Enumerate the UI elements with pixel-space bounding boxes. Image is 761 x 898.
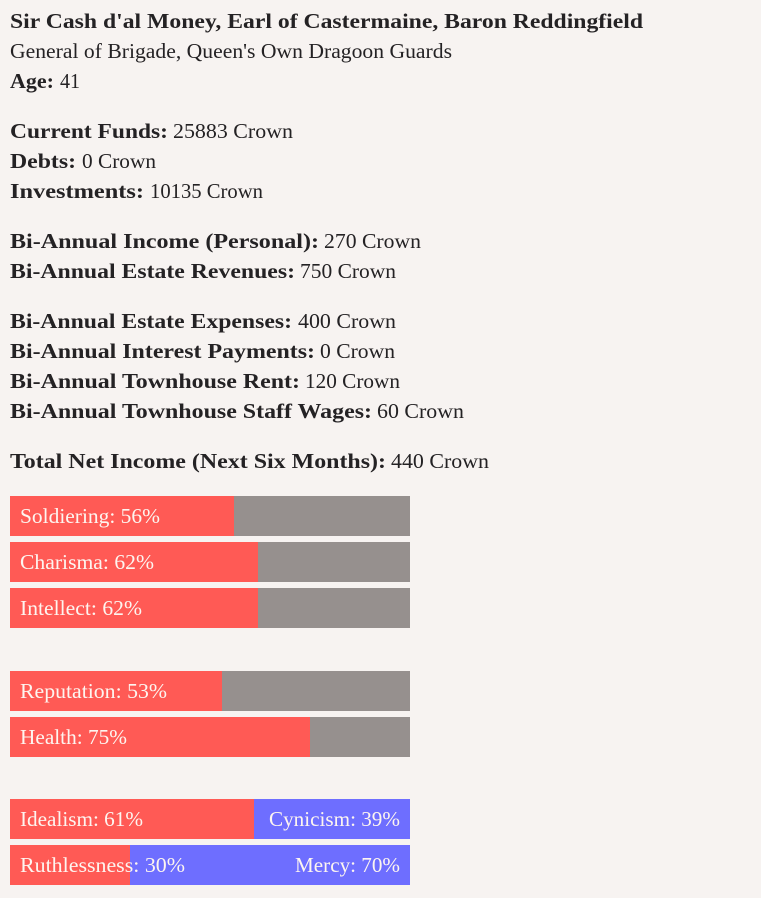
text block: income: 270 Crown <box>324 229 421 253</box>
text block: finances: 25883 Crown <box>173 119 293 143</box>
text block: income: Bi-Annual Estate Revenues: <box>10 259 295 283</box>
bar: idealism vs cynicism: Cynicism: 39% <box>269 807 400 831</box>
text block: income: Bi-Annual Income (Personal): <box>10 229 319 253</box>
text block: expenses: 60 Crown <box>377 399 464 423</box>
bar: health <box>10 717 410 757</box>
text block: income <box>10 229 421 283</box>
text block: expenses: 400 Crown <box>298 309 396 333</box>
bar: health: Health: 75% <box>20 725 127 749</box>
bar: ruthlessness vs mercy <box>10 845 410 885</box>
bar: reputation: Reputation: 53% <box>20 679 167 703</box>
bar: intellect: Intellect: 62% <box>20 596 142 620</box>
heading: character identity: Sir Cash d'al Money, Earl of Castermaine, Baron Reddingfield <box>10 9 643 33</box>
bar: reputation <box>10 671 410 711</box>
text block: expenses: Bi-Annual Townhouse Staff Wages: <box>10 399 372 423</box>
bar: intellect <box>10 588 410 628</box>
text block: finances: 0 Crown <box>82 149 156 173</box>
bar: soldiering: Soldiering: 56% <box>20 504 160 528</box>
bar: charisma: Charisma: 62% <box>20 550 154 574</box>
heading: character identity <box>10 9 643 93</box>
text block: net income: 440 Crown <box>391 449 489 473</box>
text block: expenses <box>10 309 464 423</box>
text block: expenses: Bi-Annual Interest Payments: <box>10 339 315 363</box>
bar: ruthlessness vs mercy: Mercy: 70% <box>295 853 400 877</box>
text block: expenses: 120 Crown <box>305 369 400 393</box>
text block: finances: Debts: <box>10 149 76 173</box>
text block: net income: Total Net Income (Next Six Months): <box>10 449 386 473</box>
heading: character identity: General of Brigade, Queen's Own Dragoon Guards <box>10 39 452 63</box>
text block: finances: Current Funds: <box>10 119 168 143</box>
bar: charisma <box>10 542 410 582</box>
heading: character identity: Age: <box>10 69 54 93</box>
text block: expenses: Bi-Annual Estate Expenses: <box>10 309 292 333</box>
bar: idealism vs cynicism <box>10 799 410 839</box>
bar: idealism vs cynicism: Idealism: 61% <box>20 807 143 831</box>
text block: expenses: 0 Crown <box>320 339 395 363</box>
bar: ruthlessness vs mercy: Ruthlessness: 30% <box>20 853 185 877</box>
text block: expenses: Bi-Annual Townhouse Rent: <box>10 369 300 393</box>
text block: income: 750 Crown <box>300 259 396 283</box>
text block: finances: 10135 Crown <box>150 179 263 203</box>
text block: finances <box>10 119 293 203</box>
heading: character identity: 41 <box>60 69 80 93</box>
bar: soldiering <box>10 496 410 536</box>
text block: finances: Investments: <box>10 179 144 203</box>
